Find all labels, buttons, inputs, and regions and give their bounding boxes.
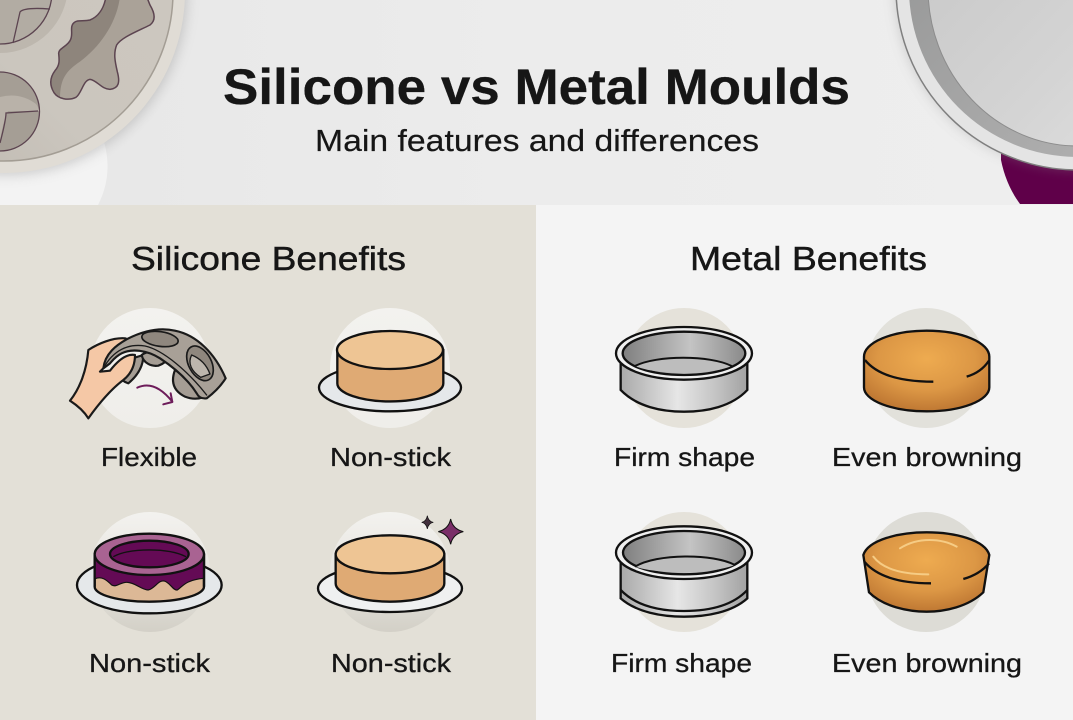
icon: plain cake on plate	[319, 308, 461, 428]
icon: round metal pan	[616, 308, 752, 428]
label: firm shape bottom: Firm shape	[611, 648, 752, 678]
heading: metal benefits: Metal Benefits	[690, 240, 927, 277]
icon: sparkling cake on plate	[318, 512, 463, 632]
heading: silicone benefits: Silicone Benefits	[131, 240, 406, 277]
icon: glossy baked cake	[863, 512, 989, 632]
label: even browning top: Even browning	[832, 442, 1022, 472]
label: even browning bottom: Even browning	[832, 648, 1022, 678]
decorative metal pan	[895, 0, 1073, 204]
decorative silicone mould	[0, 0, 187, 205]
title: Silicone vs Metal Moulds	[223, 59, 850, 115]
label: flexible: Flexible	[101, 442, 197, 472]
header background	[0, 0, 1073, 205]
label: non-stick right bottom: Non-stick	[331, 648, 452, 678]
icon: glazed ring cake on plate	[77, 512, 222, 632]
label: non-stick left bottom: Non-stick	[89, 648, 211, 678]
label: non-stick top: Non-stick	[330, 442, 452, 472]
panel: silicone benefits	[0, 205, 536, 720]
icon: hand flexing silicone mould	[70, 308, 226, 428]
panel: metal benefits	[536, 205, 1073, 720]
icon: baked golden cake	[864, 308, 989, 428]
label: firm shape top: Firm shape	[614, 442, 755, 472]
icon: banded metal pan	[616, 512, 752, 632]
subtitle: Main features and differences	[315, 123, 759, 158]
